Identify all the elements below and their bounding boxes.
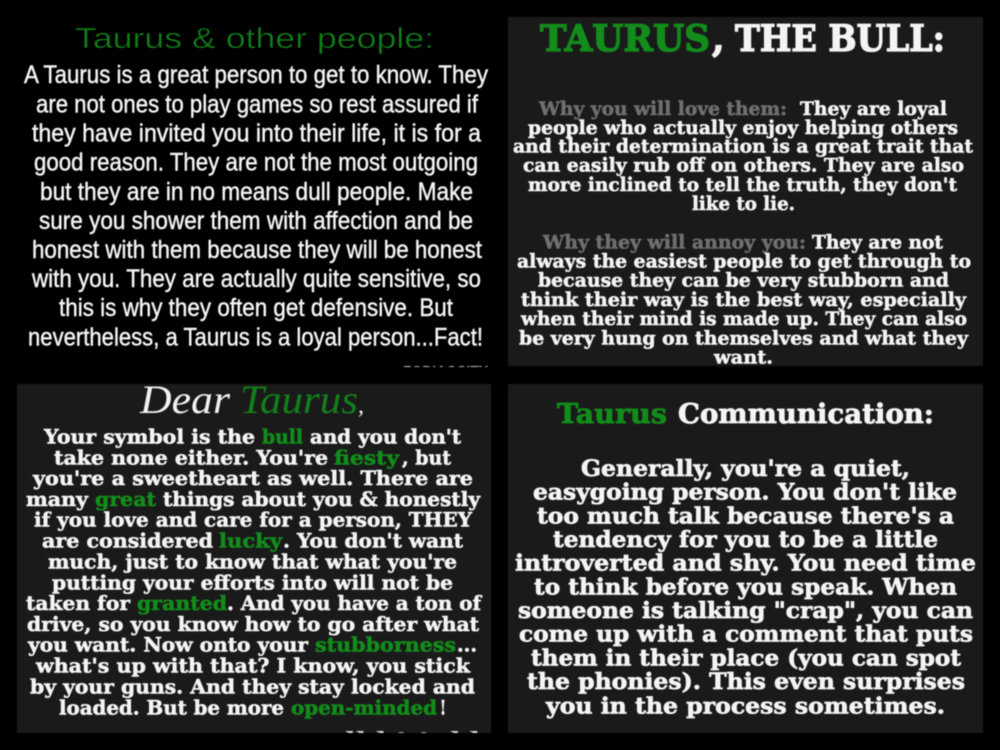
heading: Dear Taurus [139,377,364,422]
text block: why you will love them: They are loyal [800,98,947,120]
text block: why they will annoy you: when their mind is made up. They can also [520,308,967,330]
panel: Dear Taurus [17,377,491,749]
text block: Dear Taurus letter: take none either. You're [54,445,328,469]
text block: other people body: A Taurus is a great person to get to know. They [24,61,488,89]
text block: Dear Taurus letter: loaded. But be more [59,695,284,719]
watermark: cropped: ZODIACCITY [403,363,488,378]
heading: Taurus Communication [557,399,934,430]
text block: Dear Taurus letter: , but [402,445,452,469]
text block: Dear Taurus letter: great [95,487,157,511]
text block: Dear Taurus letter: fiesty [334,445,401,469]
text block: other people body: good reason. They are not the most outgoing [34,149,478,177]
text block: other people body: they have invited you into their life, it is for a [32,120,481,148]
text block: Dear Taurus letter: stubborness [315,633,456,657]
heading: Taurus, the bull [540,18,945,60]
text block: why you will love them: more inclined to tell the truth, they don't [528,174,957,196]
text block: Dear Taurus letter: granted [137,591,227,615]
text block: communication body: tendency for you to be a little [553,527,938,553]
text block: why you will love them: people who actually enjoy helping others [528,117,958,139]
heading: Taurus, the bull: TAURUS [540,18,710,60]
panel: Taurus communication [508,384,983,733]
text block: Dear Taurus letter: you're a sweetheart as well. There are [32,466,473,490]
text block: Dear Taurus letter: bull [262,424,303,448]
text block: Dear Taurus letter: are considered [42,529,213,553]
heading: Taurus, the bull: THE BULL: [735,18,945,60]
panel background [508,17,983,366]
text block: communication body: you in the process sometimes. [545,693,945,719]
text block: why they will annoy you: think their way is the best way, especially [521,289,967,311]
text block: Dear Taurus letter: things about you & honestly [163,487,481,511]
text block: why they will annoy you: Why they will annoy you: [542,231,806,253]
text block: why you will love them: can easily rub off on others. They are also [523,155,964,177]
cropped signature line: ll l t t dd [345,729,480,749]
text block: other people body: nevertheless, a Taurus is a loyal person...Fact! [28,324,483,352]
heading: Taurus Communication: Communication: [678,399,934,430]
text block: Dear Taurus letter: you want. Now onto your [27,633,308,657]
text block: Dear Taurus letter: putting your efforts into will not be [52,570,453,594]
text block: why you will love them: and their determination is a great trait that [513,136,973,158]
text block: communication body: the phonies). This even surprises [527,669,965,695]
text block: Dear Taurus letter: if you love and care for a person, THEY [34,508,473,532]
panel: Taurus, the bull [508,17,983,368]
text block: other people body: with you. They are actually quite sensitive, so [31,265,481,293]
text block: Dear Taurus letter: much, just to know that what you're [48,549,457,573]
text block: why you will love them: like to lie. [692,193,795,215]
text block: communication body: Generally, you're a quiet, [581,456,910,482]
text block: communication body: introverted and shy. You need time [515,551,976,577]
text block: other people body: sure you shower them with affection and be [39,207,473,235]
text block: other people body: but they are in no means dull people. Make [40,178,473,206]
text block: why they will annoy you: because they can be very stubborn and [538,270,949,292]
text block: Dear Taurus letter: drive, so you know how to go after what [27,612,480,636]
text block: Dear Taurus letter: taken for [26,591,130,615]
panel: Taurus and other people [24,23,488,378]
text block: Dear Taurus letter: open-minded [291,695,437,719]
heading: Dear Taurus: Dear [139,377,230,422]
text block: why they will annoy you: be very hung on themselves and what they [519,327,969,349]
text block: Dear Taurus letter: Your symbol is the [43,424,255,448]
text block: Dear Taurus letter: ... [457,633,477,657]
text block: Dear Taurus letter: ! [440,695,446,719]
text block: communication body: to think before you speak. When [534,574,957,600]
text block: Dear Taurus letter [26,424,482,719]
panel background [17,384,491,733]
heading: Taurus Communication: Taurus [557,399,667,430]
text block: other people body: are not ones to play games so rest assured if [36,91,478,119]
text block: why they will annoy you: want. [713,346,773,368]
text block: why they will annoy you: They are not [812,231,943,253]
text block: why you will love them [513,98,973,215]
text block: Dear Taurus letter: lucky [219,529,283,553]
text block: communication body: too much talk because there's a [537,503,954,529]
text block: Dear Taurus letter: and you don't [310,424,462,448]
text block: Dear Taurus letter: by your guns. And they stay locked and [30,674,475,698]
text block: Dear Taurus letter: . You don't want [283,529,464,553]
text block: Dear Taurus letter: many [26,487,89,511]
heading: Taurus & other people: Taurus & other people: [75,23,434,55]
text block: communication body: someone is talking "crap", you can [518,598,973,624]
heading: Taurus, the bull: , [712,18,725,60]
text block: communication body: easygoing person. You don't like [533,479,957,505]
text block: communication body [515,456,976,719]
text block: communication body: come up with a comment that puts [519,622,973,648]
heading: Dear Taurus: , [358,393,364,419]
text block: why they will annoy you: always the easiest people to get through to [517,251,971,273]
text block: Dear Taurus letter: what's up with that? I know, you stick [35,654,471,678]
text block: why you will love them: Why you will love them: [538,98,787,120]
text block: other people body [24,61,488,352]
text block: communication body: them in their place (you can spot [531,645,962,671]
text block: Dear Taurus letter: . And you have a ton of [227,591,482,615]
text block: why they will annoy you [517,231,971,368]
text block: other people body: honest with them because they will be honest [32,236,482,264]
text block: other people body: this is why they often get defensive. But [59,294,453,322]
heading: Dear Taurus: Taurus [240,377,358,422]
panel background [508,384,983,733]
